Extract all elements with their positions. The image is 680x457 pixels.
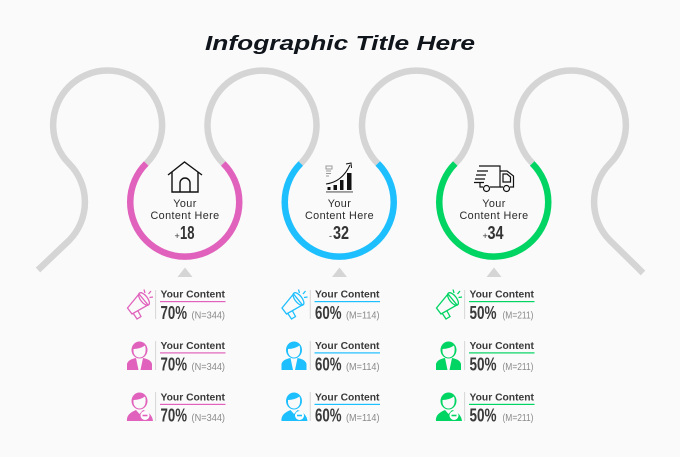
row: megaphone — [282, 288, 380, 323]
circle text — [150, 198, 220, 243]
row: person: Your Content — [470, 340, 534, 352]
pointer triangle — [486, 268, 502, 277]
column 1 — [127, 162, 239, 426]
row: person with badge — [281, 392, 380, 426]
circle text: + — [174, 231, 180, 241]
column 2 — [281, 164, 394, 426]
circle text: Your — [328, 198, 351, 210]
row: megaphone: (M=211) — [502, 310, 534, 322]
green arc — [439, 164, 548, 257]
row: person: Your Content — [160, 340, 225, 352]
row: person with badge: 70% — [160, 406, 187, 426]
circle text — [305, 198, 374, 243]
title: Infographic Title Here — [205, 32, 475, 55]
row: megaphone: Your Content — [315, 288, 380, 300]
icon: person with badge — [127, 392, 153, 421]
pointer triangle — [332, 268, 347, 277]
circle text: 34 — [488, 222, 504, 243]
row: person with badge: 50% — [470, 406, 496, 426]
row: person with badge: (N=344) — [192, 413, 225, 424]
row: megaphone — [436, 288, 534, 323]
row: person — [282, 340, 380, 374]
row: person: 70% — [160, 354, 187, 374]
row: megaphone: Your Content — [160, 288, 225, 300]
row: person with badge: (M=114) — [346, 413, 380, 424]
row: person: (N=344) — [192, 362, 225, 373]
pointer triangle — [178, 268, 192, 277]
row: megaphone: 70% — [160, 303, 187, 323]
row: person with badge — [436, 392, 534, 426]
circle text — [459, 198, 529, 243]
icon: person with badge — [281, 392, 308, 421]
icon: megaphone — [128, 290, 153, 319]
row: person with badge — [127, 392, 226, 426]
row: person with badge: Your Content — [470, 392, 534, 404]
row: megaphone: (N=344) — [192, 310, 225, 322]
circle text: 32 — [333, 222, 349, 243]
row: person with badge: 60% — [315, 406, 342, 426]
blue arc — [285, 164, 394, 257]
row: person: 50% — [470, 354, 496, 374]
icon: megaphone — [282, 290, 308, 319]
row: person: Your Content — [315, 340, 380, 352]
row: person: (M=114) — [346, 362, 380, 373]
row: person — [127, 340, 226, 374]
row: megaphone: (M=114) — [346, 310, 380, 322]
circle text: Content Here — [305, 210, 374, 222]
circle text: + — [482, 231, 488, 241]
column 3 — [436, 164, 548, 426]
circle text: Content Here — [459, 210, 529, 222]
pink arc — [130, 164, 239, 257]
grey winding path — [38, 71, 643, 273]
row: person: (M=211) — [502, 362, 534, 373]
row: person — [436, 340, 534, 374]
icon: person — [436, 342, 461, 370]
circle text: 18 — [180, 222, 194, 243]
row: person with badge: (M=211) — [502, 413, 534, 424]
icon: megaphone — [436, 290, 462, 319]
icon: delivery truck — [474, 166, 514, 192]
circle text: Your — [482, 198, 506, 210]
circle text: Your — [173, 198, 197, 210]
row: megaphone: Your Content — [470, 288, 534, 300]
row: person with badge: Your Content — [160, 392, 225, 404]
row: person: 60% — [315, 354, 342, 374]
circle text: - — [329, 231, 332, 241]
icon: person — [127, 342, 152, 370]
row: person with badge: Your Content — [315, 392, 380, 404]
icon: house — [168, 162, 202, 192]
row: megaphone — [128, 288, 226, 323]
circle text: Content Here — [150, 210, 220, 222]
row: megaphone: 50% — [470, 303, 496, 323]
icon: growth chart — [326, 163, 353, 193]
row: megaphone: 60% — [315, 303, 342, 323]
icon: person — [282, 342, 306, 370]
icon: person with badge — [436, 392, 462, 421]
